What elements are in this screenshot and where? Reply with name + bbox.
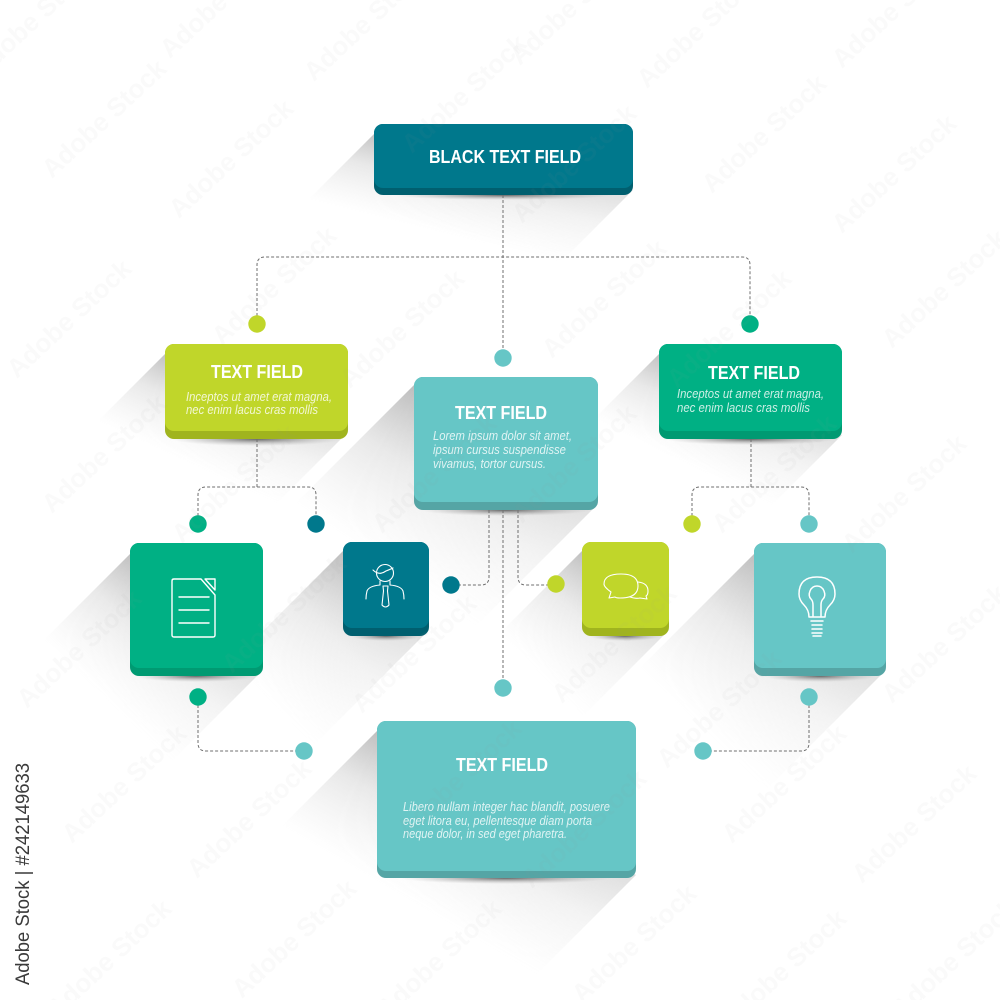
watermark pattern: Adobe Stock: [846, 758, 983, 889]
panel: left text field: TEXT FIELD: [211, 362, 303, 382]
watermark pattern: Adobe Stock: [11, 583, 148, 714]
panel: center text field: TEXT FIELD: [455, 403, 547, 423]
panel: top title box: [374, 124, 633, 195]
panel: bottom text field: eget litora eu, pellentesque diam porta: [403, 814, 592, 828]
watermark pattern: Adobe Stock: [826, 108, 963, 239]
stock id side label: Adobe Stock | #242149633: [13, 763, 34, 985]
watermark pattern: Adobe Stock: [226, 873, 363, 1000]
watermark pattern: Adobe Stock: [696, 68, 833, 199]
connector dots: [189, 315, 818, 760]
panel: left text field: Inceptos ut amet erat magna,: [186, 390, 332, 404]
watermark pattern: Adobe Stock: [396, 28, 533, 159]
watermark pattern: Adobe Stock: [516, 763, 653, 894]
dashed connectors: [198, 195, 809, 751]
panel: left text field: [165, 344, 348, 439]
watermark pattern: Adobe Stock: [56, 718, 193, 849]
panel: person icon box: [343, 542, 429, 636]
watermark pattern: Adobe Stock: [366, 408, 503, 539]
watermark pattern: Adobe Stock: [506, 398, 643, 529]
watermark pattern: Adobe Stock: [346, 588, 483, 719]
panel: right text field: [659, 344, 842, 439]
watermark pattern: Adobe Stock: [546, 578, 683, 709]
watermark pattern: Adobe Stock: [36, 388, 173, 519]
watermark pattern: Adobe Stock: [36, 53, 173, 184]
watermark pattern: Adobe Stock: [1, 253, 138, 384]
panel: right text field: Inceptos ut amet erat magna,: [677, 387, 824, 401]
panel: center text field: Lorem ipsum dolor sit amet,: [433, 429, 572, 443]
panel: bottom text field: neque dolor, in sed eget pharetra.: [403, 827, 567, 841]
panel: left text field: nec enim lacus cras mollis: [186, 403, 318, 417]
panel: bottom text field: Libero nullam integer hac blandit, posuere: [403, 800, 610, 814]
watermark pattern: Adobe Stock: [506, 98, 643, 229]
watermark pattern: Adobe Stock: [166, 418, 303, 549]
icon: document: [172, 579, 215, 637]
panel: center text field: ipsum cursus suspendisse: [433, 443, 566, 457]
icon: person with tie: [366, 564, 404, 607]
watermark pattern: Adobe Stock: [216, 548, 353, 679]
panel: bottom text field: TEXT FIELD: [456, 755, 548, 775]
contact shadows under boxes: [136, 190, 876, 884]
watermark pattern: Adobe Stock: [391, 713, 528, 844]
watermark pattern: Adobe Stock: [836, 428, 973, 559]
watermark pattern: Adobe Stock: [716, 718, 853, 849]
panel: right text field: TEXT FIELD: [708, 363, 800, 383]
watermark pattern: Adobe Stock: [181, 753, 318, 884]
panel: chat icon box: [582, 542, 669, 636]
watermark pattern: Adobe Stock: [334, 263, 471, 394]
watermark pattern: Adobe Stock: [163, 93, 300, 224]
icon: lightbulb: [799, 577, 835, 636]
panel: document icon box: [130, 543, 263, 676]
watermark pattern: Adobe Stock: [536, 233, 673, 364]
watermark pattern: Adobe Stock: [661, 263, 798, 394]
panel: center text field: vivamus, tortor cursus.: [433, 457, 546, 471]
panel: top title box: BLACK TEXT FIELD: [429, 147, 581, 167]
panel: bottom text field: [377, 721, 636, 878]
icon: speech bubbles: [604, 574, 648, 599]
watermark pattern: Adobe Stock: [651, 643, 788, 774]
watermark pattern: Adobe Stock: [706, 408, 843, 539]
watermark pattern: Adobe Stock: [206, 220, 343, 351]
panel: center text field: [414, 377, 598, 510]
panel: lightbulb icon box: [754, 543, 886, 676]
panel: right text field: nec enim lacus cras mollis: [677, 401, 810, 415]
long shadows behind boxes: [44, 128, 886, 975]
